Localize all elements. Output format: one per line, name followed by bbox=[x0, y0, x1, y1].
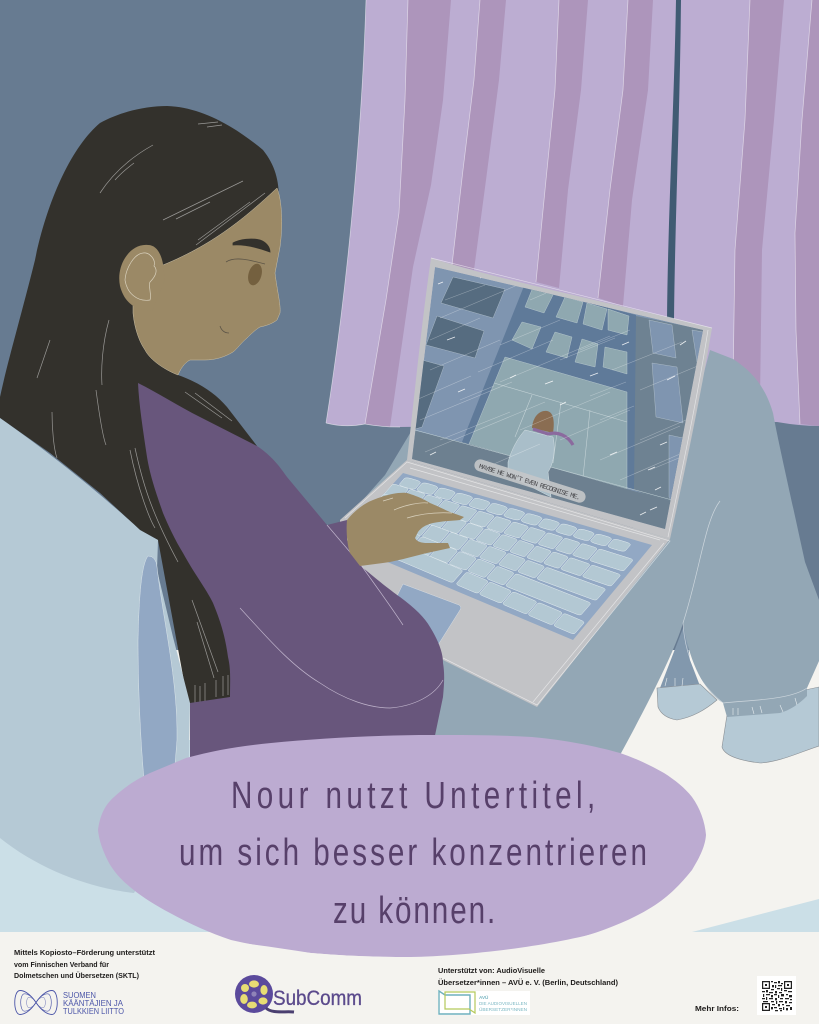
face bbox=[119, 188, 282, 375]
SKTL wordmark: KÄÄNTÄJIEN JA bbox=[63, 999, 124, 1008]
background: pale blue floor area under chair bbox=[0, 740, 220, 932]
sock: far foot bbox=[657, 684, 717, 720]
laptop bbox=[340, 258, 712, 707]
right strip bbox=[634, 316, 705, 505]
cuff marks bbox=[665, 678, 797, 715]
caption text: um sich besser konzentrieren bbox=[179, 832, 647, 874]
curtain highlight lines bbox=[326, 0, 812, 427]
curtains bbox=[326, 0, 819, 427]
screen frame bbox=[407, 258, 712, 539]
leg wedge left of laptop bbox=[345, 430, 412, 520]
QR modules bbox=[762, 981, 792, 1011]
hair bbox=[532, 411, 554, 433]
curtain fabric bbox=[326, 0, 819, 427]
AVÜ wordmark: DIE AUDIOVISUELLEN bbox=[479, 1001, 527, 1006]
funding text: Mittels Kopiosto–Förderung unterstützt bbox=[14, 948, 155, 957]
infinity mark bbox=[15, 990, 57, 1014]
trouser fold line bbox=[683, 501, 807, 703]
funding text bbox=[14, 948, 155, 980]
rain dashes bbox=[430, 275, 686, 515]
logo: AVÜ bbox=[438, 991, 530, 1015]
more info label: Mehr Infos: bbox=[695, 1004, 739, 1013]
subtitle bubble: MAYBE HE WON'T EVEN RECOGNISE ME. bbox=[478, 463, 581, 503]
eyebrow bbox=[233, 239, 270, 252]
teal speech frame bbox=[439, 991, 470, 1014]
eyelid bbox=[226, 259, 265, 264]
coat bbox=[508, 430, 554, 497]
caption bubble bbox=[98, 735, 706, 957]
sweater fold lines bbox=[240, 525, 443, 708]
hand bbox=[347, 493, 464, 566]
screen frame highlight bbox=[431, 258, 712, 537]
film tail bbox=[266, 1008, 294, 1012]
keyboard well bbox=[345, 473, 652, 640]
caption text bbox=[179, 775, 647, 932]
reel holes bbox=[240, 980, 268, 1008]
logo: SubComm bbox=[235, 975, 362, 1013]
hair highlights bbox=[37, 122, 265, 704]
floor patch bottom right bbox=[692, 899, 819, 932]
building lines bbox=[494, 383, 627, 477]
curtain fold shadows bbox=[365, 0, 819, 427]
film reel bbox=[235, 975, 273, 1013]
finger lines bbox=[383, 498, 452, 518]
green speech frame bbox=[445, 992, 475, 1013]
bottom band bbox=[405, 430, 672, 532]
logo background bbox=[438, 991, 530, 1015]
head shape bbox=[133, 188, 282, 375]
funding text: Dolmetschen und Übersetzen (SKTL) bbox=[14, 971, 139, 980]
QR finder squares bbox=[762, 981, 792, 1011]
laptop base bbox=[340, 460, 670, 707]
footer bar bbox=[0, 932, 819, 1024]
support text bbox=[438, 966, 618, 987]
cushion bbox=[138, 556, 177, 790]
AVÜ wordmark bbox=[479, 994, 527, 1012]
funding text: vom Finnischen Verband für bbox=[14, 960, 109, 969]
eye bbox=[246, 262, 264, 287]
keyboard keys bbox=[344, 477, 634, 634]
caption text: Nour nutzt Untertitel, bbox=[231, 775, 595, 817]
teal buildings bbox=[469, 287, 629, 489]
sock: near foot bbox=[722, 687, 819, 763]
support text: Unterstützt von: AudioVisuelle bbox=[438, 966, 545, 975]
QR background bbox=[757, 976, 796, 1015]
chair back bbox=[0, 418, 190, 893]
sweater body bbox=[138, 383, 444, 770]
ear bbox=[119, 245, 165, 311]
support text: Übersetzer*innen – AVÜ e. V. (Berlin, Deutschland) bbox=[438, 978, 618, 987]
trackpad bbox=[395, 584, 461, 645]
SKTL wordmark: TULKKIEN LIITTO bbox=[63, 1007, 124, 1016]
rain bbox=[416, 284, 700, 480]
scene background bbox=[412, 267, 703, 529]
armchair bbox=[0, 418, 190, 893]
hair mass bbox=[0, 106, 279, 705]
band top line bbox=[415, 430, 672, 500]
ear inner line bbox=[125, 253, 156, 300]
hand shape bbox=[347, 493, 464, 566]
blue panes bbox=[649, 320, 703, 505]
reel hub bbox=[251, 991, 257, 997]
dark roofs bbox=[412, 277, 505, 430]
SKTL wordmark bbox=[63, 991, 124, 1016]
SubComm wordmark: SubComm bbox=[273, 987, 362, 1010]
hair bbox=[0, 106, 279, 705]
sweater bbox=[138, 383, 444, 770]
ankle of far leg bbox=[660, 623, 700, 688]
background: wall bbox=[0, 0, 819, 660]
curtain gap bbox=[667, 0, 681, 320]
SKTL wordmark: SUOMEN bbox=[63, 991, 96, 1000]
background: floor bbox=[0, 650, 819, 1024]
scarf bbox=[533, 429, 573, 445]
trousers: legs bbox=[430, 350, 819, 800]
screen image: animated scene bbox=[405, 267, 705, 532]
smile bbox=[220, 326, 229, 333]
leg shape bbox=[430, 350, 819, 800]
logo: SKTL bbox=[15, 990, 124, 1016]
base edge lines bbox=[345, 462, 670, 705]
street bbox=[462, 286, 636, 490]
QR code bbox=[757, 976, 796, 1015]
AVÜ wordmark: AVÜ bbox=[479, 994, 489, 1000]
AVÜ wordmark: ÜBERSETZER*INNEN bbox=[479, 1006, 527, 1012]
caption text: zu können. bbox=[333, 890, 495, 932]
figure in coat bbox=[508, 411, 573, 497]
